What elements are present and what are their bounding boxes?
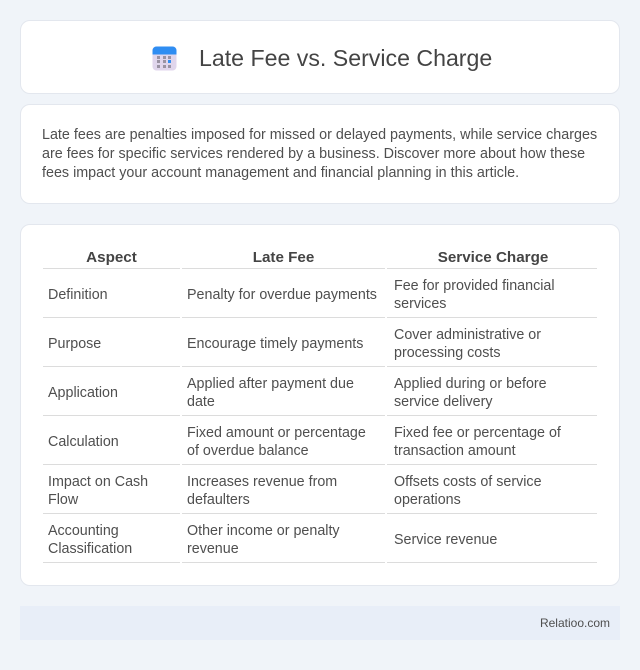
cell: operations [394, 492, 461, 508]
table card [20, 224, 620, 586]
cell [187, 425, 366, 459]
cell: Fee for provided financial [394, 278, 555, 294]
cell [394, 474, 542, 508]
footer bar [20, 606, 620, 640]
title: Late Fee vs. Service Charge [199, 45, 492, 71]
footer text: Relatioo.com [540, 616, 610, 630]
cell: defaulters [187, 492, 250, 508]
cell: Fixed fee or percentage of [394, 425, 561, 441]
intro text: Late fees are penalties imposed for missed or delayed payments, while service charges [42, 127, 597, 143]
cell: services [394, 296, 446, 312]
cell: Applied during or before [394, 376, 547, 392]
cell: Encourage timely payments [187, 336, 363, 352]
cell: Service revenue [394, 532, 497, 548]
cell: Cover administrative or [394, 327, 541, 343]
intro text: are fees for specific services rendered by a business. Discover more about how these [42, 146, 585, 162]
row: Impact on Cash Flow: Impact on Cash [48, 474, 148, 490]
row: Accounting Classification [48, 523, 132, 557]
cell: Fixed amount or percentage [187, 425, 366, 441]
icon: calendar [152, 46, 176, 70]
row: Accounting Classification: Classification [48, 541, 132, 557]
row: Definition: Definition [48, 287, 108, 303]
row: Accounting Classification: Accounting [48, 523, 119, 539]
row: Purpose: Purpose [48, 336, 101, 352]
cell: Applied after payment due [187, 376, 354, 392]
cell: Penalty for overdue payments [187, 287, 377, 303]
cell: of overdue balance [187, 443, 309, 459]
cell [187, 523, 340, 557]
cell [394, 327, 541, 361]
cell: processing costs [394, 345, 500, 361]
intro text: fees impact your account management and financial planning in this article. [42, 165, 519, 181]
header: Service Charge: Service Charge [438, 249, 548, 266]
intro text [42, 127, 597, 181]
row: Application: Application [48, 385, 118, 401]
cell: transaction amount [394, 443, 516, 459]
cell [187, 474, 337, 508]
cell [394, 376, 547, 410]
cell: Offsets costs of service [394, 474, 542, 490]
cell: Increases revenue from [187, 474, 337, 490]
row: Impact on Cash Flow [48, 474, 148, 508]
cell: revenue [187, 541, 239, 557]
cell [187, 376, 354, 410]
title card [20, 20, 620, 94]
cell: date [187, 394, 215, 410]
cell: service delivery [394, 394, 493, 410]
row: Impact on Cash Flow: Flow [48, 492, 78, 508]
cell: Other income or penalty [187, 523, 340, 539]
cell [394, 425, 561, 459]
intro card [20, 104, 620, 204]
cell [394, 278, 555, 312]
header: Aspect: Aspect [86, 249, 137, 266]
header: Late Fee: Late Fee [253, 249, 314, 266]
row: Calculation: Calculation [48, 434, 119, 450]
